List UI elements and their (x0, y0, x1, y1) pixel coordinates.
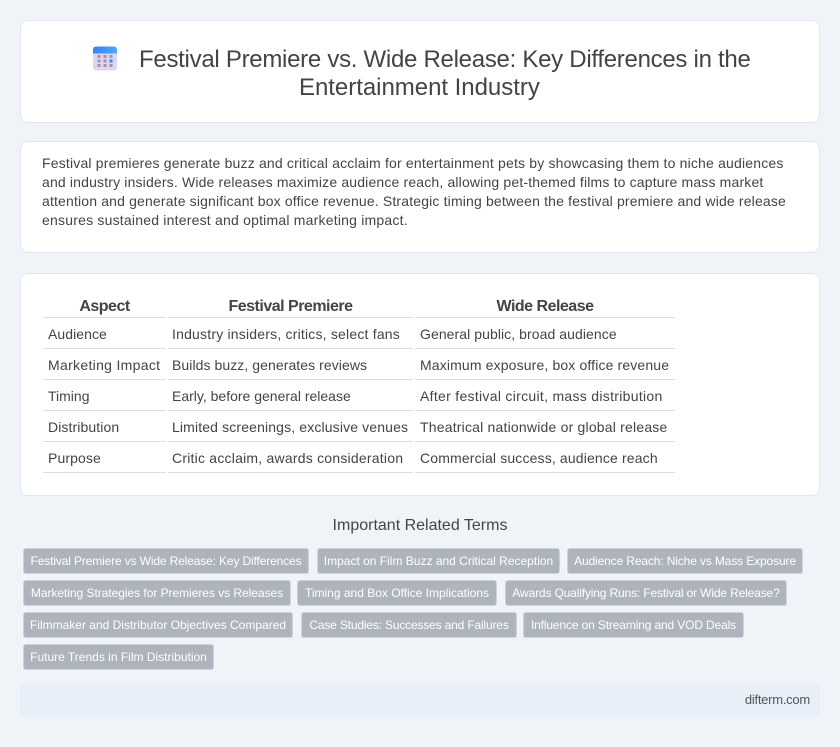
row: marketing impact: Builds buzz, generates reviews (172, 357, 367, 373)
row: purpose: Critic acclaim, awards consideration (172, 450, 403, 466)
row: timing: After festival circuit, mass distribution (420, 388, 663, 404)
tag: Impact on Film Buzz and Critical Reception (324, 554, 553, 568)
tag (567, 548, 803, 574)
tag: Future Trends in Film Distribution (30, 650, 207, 664)
row: audience (43, 326, 675, 349)
row: distribution: Distribution (48, 419, 119, 435)
header row: Wide Release (496, 298, 594, 315)
footer credit: difterm.com (745, 692, 810, 707)
row: timing: Early, before general release (172, 388, 351, 404)
row: distribution: Limited screenings, exclusive venues (172, 419, 408, 435)
panel: comparison table (20, 273, 820, 496)
icon: calendar (93, 46, 117, 70)
row: purpose (43, 450, 675, 473)
header row: Festival Premiere (228, 298, 353, 315)
tag (317, 548, 560, 574)
row: distribution (43, 419, 675, 442)
heading: important related terms: Important Related Terms (333, 517, 507, 534)
row: timing (43, 388, 675, 411)
tag (523, 612, 744, 638)
row: timing: Timing (48, 388, 90, 404)
tag (23, 644, 214, 670)
panel: introduction (20, 141, 820, 253)
row: purpose: Commercial success, audience reach (420, 450, 658, 466)
title line 1: Festival Premiere vs. Wide Release: Key Differences in the (139, 46, 751, 73)
tag: Marketing Strategies for Premieres vs Releases (31, 586, 283, 600)
row: marketing impact: Maximum exposure, box office revenue (420, 357, 669, 373)
tag (23, 548, 309, 574)
header row (43, 298, 675, 318)
row: audience: Audience (48, 326, 107, 342)
tag (505, 580, 787, 606)
intro text (42, 155, 786, 228)
tag: Timing and Box Office Implications (305, 586, 489, 600)
panel: title header (20, 20, 820, 123)
tag (23, 612, 293, 638)
intro text: Festival premieres generate buzz and critical acclaim for entertainment pets by showcasing them to niche audiences (42, 155, 784, 171)
tag: Festival Premiere vs Wide Release: Key Differences (31, 554, 301, 568)
tag (23, 580, 291, 606)
tag: Audience Reach: Niche vs Mass Exposure (574, 554, 796, 568)
row: audience: General public, broad audience (420, 326, 617, 342)
row: distribution: Theatrical nationwide or global release (420, 419, 668, 435)
tag: Case Studies: Successes and Failures (309, 618, 509, 632)
tag: Influence on Streaming and VOD Deals (531, 618, 736, 632)
intro text: attention and generate significant box office revenue. Strategic timing between the festival premiere and wide release (42, 193, 786, 209)
intro text: ensures sustained interest and optimal marketing impact. (42, 212, 408, 228)
tag (297, 580, 497, 606)
tag: Filmmaker and Distributor Objectives Compared (30, 618, 286, 632)
footer bar (20, 683, 820, 717)
related term tags (23, 548, 803, 670)
row: audience: Industry insiders, critics, select fans (172, 326, 400, 342)
row: marketing impact (43, 357, 675, 380)
intro text: and industry insiders. Wide releases maximize audience reach, allowing pet-themed films to capture mass market (42, 174, 763, 190)
tag (301, 612, 517, 638)
title line 2: Entertainment Industry (299, 74, 540, 101)
tag: Awards Qualifying Runs: Festival or Wide Release? (512, 586, 780, 600)
row: marketing impact: Marketing Impact (48, 357, 160, 373)
header row: Aspect (79, 298, 130, 315)
row: purpose: Purpose (48, 450, 101, 466)
